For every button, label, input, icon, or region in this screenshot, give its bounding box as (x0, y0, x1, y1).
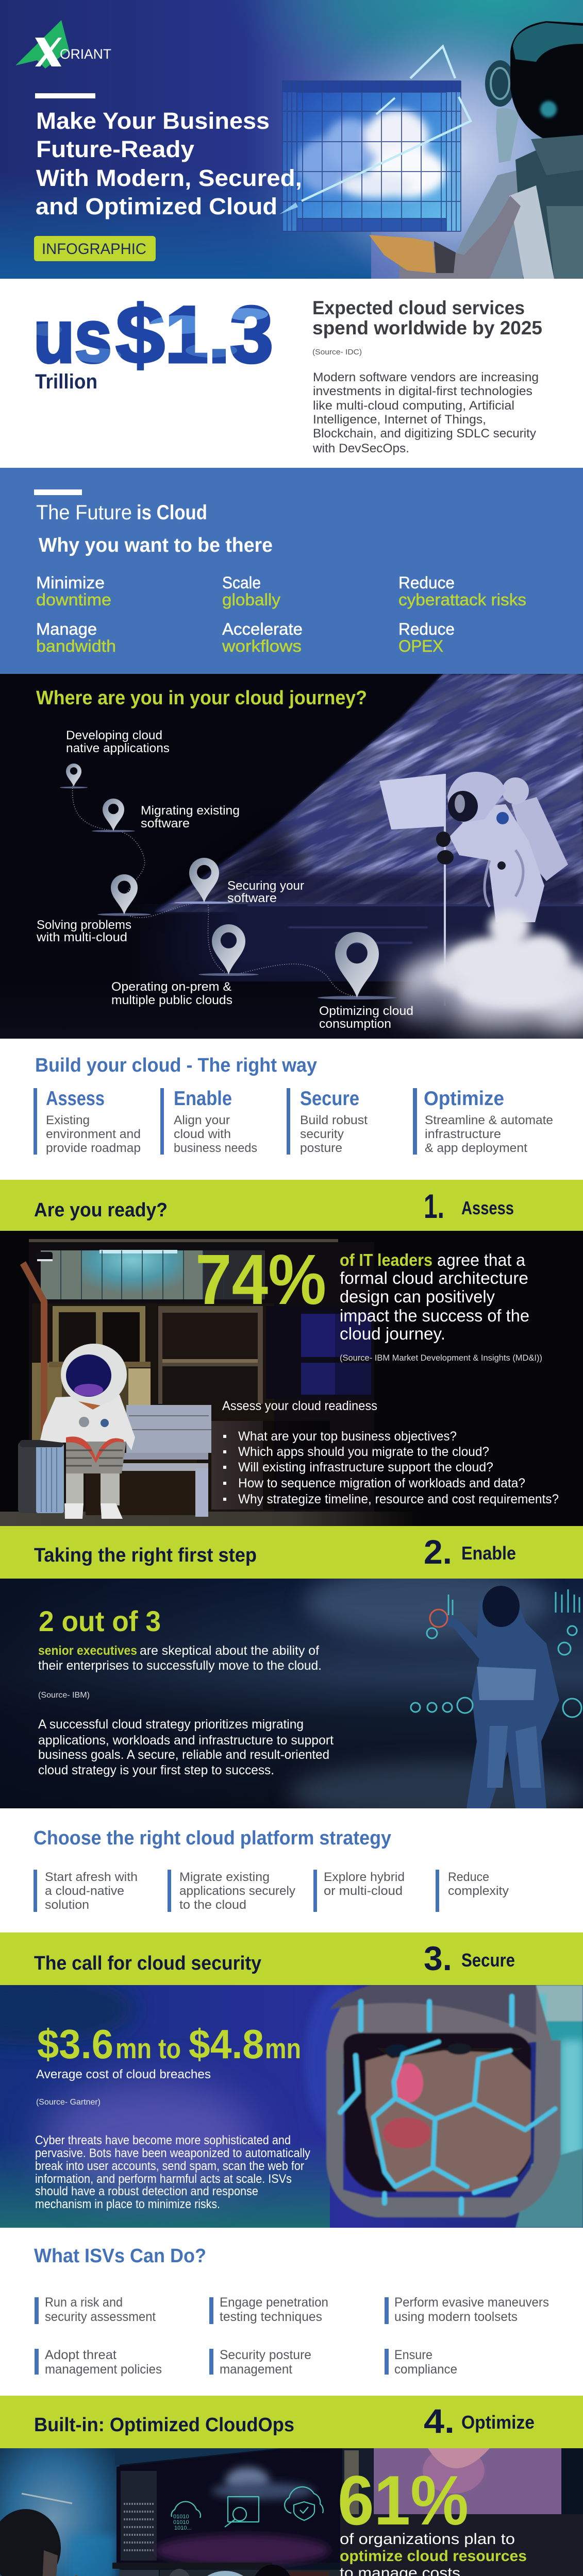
column: assess (34, 1088, 141, 1155)
text block: of IT leaders (340, 1250, 542, 1363)
icon: pin 5 operating (198, 924, 259, 976)
band: are you ready / assess: Are you ready? (34, 1199, 168, 1221)
labels: journey stages: Migrating existing (141, 804, 240, 818)
item: explore hybrid: or multi-cloud (324, 1884, 403, 1898)
panel: 61 percent optimize resources (0, 2448, 583, 2576)
screen icons (159, 2487, 323, 2576)
list: cloud benefits: Accelerate (222, 620, 303, 638)
labels: journey stages: consumption (319, 1017, 391, 1031)
clouds (392, 945, 583, 1046)
panel: build your cloud (34, 1055, 553, 1155)
item: evasive maneuvers (385, 2295, 549, 2324)
lit wall (41, 1250, 203, 1299)
band: the call for cloud security / secure: Secure (461, 1950, 515, 1971)
item: reduce complexity: Reduce (448, 1870, 489, 1884)
text block: senior executives: business goals. A secure, reliable and result-oriented (38, 1748, 329, 1762)
panel: spend statistic (34, 289, 542, 455)
column: optimize (413, 1088, 553, 1155)
icon: pin 1 developing (60, 764, 88, 788)
text block: modern software vendors: Modern software vendors are increasing (313, 370, 539, 384)
text block: cyber threats (35, 2067, 310, 2211)
text block: cyber threats: Cyber threats have become more sophisticated and (35, 2133, 291, 2147)
title (35, 93, 302, 219)
column: optimize: Streamline & automate (425, 1113, 553, 1127)
text block: modern software vendors: like multi-cloud computing, Artificial (313, 399, 514, 413)
item: run a risk assessment: Run a risk and (45, 2295, 123, 2310)
big number: US$1.3 trillion: $ (115, 289, 165, 381)
suit (449, 804, 544, 922)
panel: what ISVs can do (34, 2245, 549, 2377)
panel: average cost of cloud breaches (0, 1985, 583, 2228)
heading: expected cloud services: (Source- IDC) (312, 348, 362, 357)
item: threat management: Adopt threat (45, 2348, 116, 2362)
text block: of IT leaders: design can positively (340, 1287, 495, 1306)
column: assess: provide roadmap (46, 1141, 141, 1155)
item: explore hybrid (313, 1870, 405, 1912)
badge: infographic: INFOGRAPHIC (42, 241, 146, 258)
band: built-in optimized cloudops / optimize: Built-in: Optimized CloudOps (34, 2414, 294, 2436)
panel: choose the right cloud platform strategy (34, 1827, 509, 1912)
downpipe (20, 1261, 47, 1432)
text block: cyber threats: Average cost of cloud breaches (36, 2067, 211, 2081)
heading: the future is cloud: The Future (36, 501, 132, 524)
heading: what ISVs can do: What ISVs Can Do? (34, 2245, 206, 2267)
band: built-in optimized cloudops / optimize: Optimize (461, 2412, 535, 2433)
item: migrate existing (168, 1870, 295, 1912)
column: enable: Align your (174, 1113, 230, 1127)
illustration: astronaut with holographic rings (289, 1566, 583, 1824)
labels: journey stages: native applications (66, 741, 170, 755)
item: evasive maneuvers: Perform evasive maneuvers (394, 2295, 549, 2310)
text block: of IT leaders: formal cloud architecture (340, 1268, 528, 1287)
flag and pole (444, 774, 446, 1006)
column: enable (160, 1088, 257, 1155)
big number: 61%: 61% (338, 2461, 469, 2539)
item: penetration testing: Engage penetration (220, 2295, 328, 2310)
column: assess: Assess (46, 1088, 105, 1110)
list: cloud benefits: Reduce (398, 573, 455, 592)
hand and forearm (398, 196, 521, 279)
column: secure (287, 1088, 368, 1155)
icon: pin 3 solving (97, 874, 151, 916)
suitcase (18, 1442, 64, 1513)
list: assess your cloud readiness: Why strategize timeline, resource and cost requirements? (238, 1492, 559, 1506)
item: start afresh (34, 1870, 138, 1912)
text block: optimize resources: of organizations plan to (340, 2531, 515, 2548)
badge: infographic (34, 236, 156, 261)
labels: journey stages (36, 728, 413, 1031)
path: journey dotted route (73, 786, 356, 996)
column: optimize: Optimize (424, 1088, 504, 1110)
item: reduce complexity: complexity (448, 1884, 509, 1898)
item: start afresh: solution (45, 1898, 89, 1912)
text block: cyber threats: pervasive. Bots have been weaponized to automatically (35, 2146, 310, 2160)
labels: journey stages: Solving problems (37, 918, 131, 932)
screen icons: 01010 (173, 2514, 189, 2520)
big number: US$1.3 trillion: us (34, 295, 112, 378)
labels: journey stages: with multi-cloud (36, 930, 127, 944)
illustration: astronaut on a bench outside a hut (0, 1239, 583, 1526)
item: migrate existing: to the cloud (179, 1898, 246, 1912)
band: the call for cloud security / secure: 3. (424, 1939, 452, 1977)
item: start afresh: a cloud-native (45, 1884, 124, 1898)
labels: journey stages: Optimizing cloud (319, 1004, 413, 1018)
text block: modern software vendors: with DevSecOps. (312, 442, 409, 455)
labels: journey stages: Operating on-prem & (111, 980, 231, 994)
item: run a risk assessment (35, 2295, 156, 2324)
title: Make Your Business (36, 108, 270, 134)
text block: cyber threats: information, and perform harmful acts at scale. ISVs (35, 2172, 292, 2186)
column: secure: Build robust (300, 1113, 368, 1127)
list: assess your cloud readiness: Which apps should you migrate to the cloud? (238, 1445, 489, 1459)
text block: modern software vendors: Blockchain, and digitizing SDLC security (313, 427, 536, 440)
text block: senior executives: (Source- IBM) (38, 1691, 90, 1700)
band: built-in optimized cloudops / optimize (0, 2396, 583, 2448)
column: optimize: & app deployment (425, 1141, 527, 1155)
item: reduce complexity (436, 1870, 509, 1912)
item: security posture (209, 2348, 311, 2377)
heading: why you want to be there: Why you want to be there (39, 534, 273, 556)
list: cloud benefits: globally (222, 590, 280, 609)
column: optimize: infrastructure (425, 1127, 501, 1141)
labels: journey stages: software (227, 891, 277, 905)
windows and frames (32, 1303, 274, 1520)
heading: the future is cloud (36, 501, 207, 524)
panel: 74 percent of IT leaders (0, 1231, 583, 1526)
band: the call for cloud security / secure (0, 1933, 583, 1985)
list: cloud benefits: workflows (222, 637, 302, 655)
item: start afresh: Start afresh with (45, 1870, 138, 1884)
text block: modern software vendors (312, 370, 539, 455)
column: enable: business needs (174, 1141, 257, 1155)
text block: senior executives: are skeptical about the ability of (140, 1643, 319, 1658)
heading: expected cloud services: Expected cloud services (312, 297, 525, 318)
panel: cloud journey (0, 674, 583, 1039)
text block: of IT leaders: (Source- IBM Market Development & Insights (MD&I)) (340, 1353, 542, 1363)
labels: journey stages: Securing your (227, 879, 304, 893)
illustration: cloud operations control room (0, 2447, 583, 2576)
item: ensure compliance: compliance (394, 2362, 457, 2377)
heading: choose strategy: Choose the right cloud platform strategy (34, 1827, 391, 1849)
stat: $3.6mn to $4.8mn: mn (265, 2032, 301, 2064)
screen icons: 1010... (174, 2525, 192, 2531)
stat: $3.6mn to $4.8mn (37, 2021, 301, 2067)
text block: senior executives: cloud strategy is your first step to success. (38, 1763, 274, 1777)
text block: modern software vendors: investments in digital-first technologies (313, 384, 532, 398)
column: secure: Secure (300, 1088, 359, 1110)
illustration: wire cage with cloud (282, 81, 461, 231)
item: migrate existing: applications securely (179, 1884, 295, 1898)
text block: senior executives: A successful cloud strategy prioritizes migrating (38, 1717, 304, 1732)
list: assess your cloud readiness: What are your top business objectives? (238, 1429, 457, 1444)
list: cloud benefits: cyberattack risks (398, 590, 526, 609)
illustration: moon landscape and astronaut (0, 674, 583, 1039)
logo: Xoriant: ORIANT (60, 46, 111, 62)
text block: optimize resources: optimize cloud resources (340, 2548, 527, 2565)
logo: Xoriant (15, 20, 111, 69)
big number: 74%: 74% (195, 1240, 326, 1319)
list: cloud benefits: Scale (222, 573, 261, 592)
panel: 2 out of 3 senior executives (0, 1579, 583, 1808)
column: enable: cloud with (174, 1127, 231, 1141)
title: and Optimized Cloud (36, 193, 277, 219)
labels: journey stages: multiple public clouds (111, 993, 232, 1007)
list: cloud benefits: Minimize (36, 573, 105, 592)
panel: the future is cloud (0, 468, 583, 674)
stat: $3.6mn to $4.8mn: mn to (115, 2032, 181, 2064)
item: run a risk assessment: security assessment (45, 2310, 156, 2324)
text block: senior executives: senior executives (38, 1643, 137, 1658)
list: cloud benefits: Reduce (398, 620, 455, 638)
item: penetration testing: testing techniques (220, 2310, 322, 2324)
icon: pin 4 securing (174, 858, 234, 904)
item: threat management (35, 2348, 162, 2377)
item: penetration testing (209, 2295, 328, 2324)
band: are you ready / assess: Assess (461, 1197, 514, 1218)
item: security posture: management (220, 2362, 292, 2377)
band: built-in optimized cloudops / optimize: 4. (424, 2402, 455, 2440)
panel: hero banner (0, 0, 583, 279)
person at desk and monitors (253, 2565, 292, 2576)
icon: hero triangle line (279, 46, 471, 214)
text block: senior executives (38, 1643, 334, 1777)
item: evasive maneuvers: using modern toolsets (394, 2310, 518, 2324)
band: are you ready / assess (0, 1180, 583, 1231)
heading: build your cloud: Build your cloud - The right way (35, 1055, 317, 1076)
title: With Modern, Secured, (36, 165, 302, 191)
text block: of IT leaders: agree that a (437, 1250, 526, 1269)
big number: US$1.3 trillion: Trillion (35, 370, 97, 393)
list: cloud benefits: bandwidth (36, 637, 116, 655)
icon: pin 2 migrating (92, 799, 135, 832)
band: taking the right first step / enable (0, 1526, 583, 1579)
illustration: astronaut face with hexagon light (304, 1984, 583, 2228)
column: enable: Enable (174, 1088, 232, 1110)
item: threat management: management policies (45, 2362, 162, 2377)
list: cloud benefits: Manage (36, 620, 97, 638)
band: taking the right first step / enable: Enable (461, 1543, 516, 1564)
list: assess your cloud readiness (222, 1399, 559, 1506)
text block: modern software vendors: Intelligence, Internet of Things, (313, 413, 486, 427)
screen icons: 01010 (173, 2519, 189, 2526)
item: ensure compliance (385, 2348, 457, 2377)
heading: the future is cloud: is Cloud (137, 501, 207, 524)
labels: journey stages: software (141, 817, 190, 831)
band: are you ready / assess: 1. (424, 1187, 444, 1225)
big number: US$1.3 trillion (34, 289, 273, 393)
stat: $3.6mn to $4.8mn: $3.6 (37, 2021, 113, 2067)
stat: 2 out of 3: 2 out of 3 (39, 1605, 161, 1637)
visor rim (326, 2040, 561, 2217)
list: cloud benefits: OPEX (398, 637, 443, 655)
list: assess your cloud readiness: Will existing infrastructure support the cloud? (238, 1460, 493, 1475)
text block: senior executives: their enterprises to successfully move to the cloud. (38, 1658, 322, 1673)
visor (343, 2033, 531, 2192)
suit (40, 1395, 135, 1450)
list: assess your cloud readiness: Assess your cloud readiness (222, 1399, 377, 1413)
list: cloud benefits (36, 573, 526, 655)
list: assess your cloud readiness: How to sequence migration of workloads and data? (238, 1476, 525, 1490)
bench (126, 1405, 211, 1453)
item: security posture: Security posture (220, 2348, 311, 2362)
text block: senior executives: applications, workloads and infrastructure to support (38, 1733, 334, 1748)
text block: optimize resources (339, 2531, 527, 2576)
stat: $3.6mn to $4.8mn: $4.8 (189, 2021, 264, 2067)
list: cloud benefits: downtime (36, 590, 111, 609)
band: the call for cloud security / secure: The call for cloud security (34, 1953, 261, 1974)
item: explore hybrid: Explore hybrid (324, 1870, 405, 1884)
heading: expected cloud services: spend worldwide by 2025 (312, 317, 542, 338)
column: secure: posture (300, 1141, 342, 1155)
backpack (511, 797, 568, 881)
floor (0, 1512, 583, 1526)
big number: US$1.3 trillion: 1.3 (165, 290, 273, 380)
band: taking the right first step / enable: Taking the right first step (34, 1545, 257, 1566)
illustration: robot astronaut with open hand (369, 21, 583, 279)
column: assess: environment and (46, 1127, 141, 1141)
column: assess: Existing (46, 1113, 90, 1127)
item: ensure compliance: Ensure (394, 2348, 432, 2362)
title: Future-Ready (36, 136, 194, 162)
heading: where are you in your cloud journey: Where are you in your cloud journey? (36, 687, 367, 709)
text block: of IT leaders: of IT leaders (340, 1250, 432, 1269)
item: migrate existing: Migrate existing (179, 1870, 270, 1884)
text block: cyber threats: should have a robust detection and response (35, 2184, 258, 2198)
column: secure: security (300, 1127, 344, 1141)
text block: cyber threats: break into user accounts, send spam, scan the web for (35, 2159, 304, 2173)
labels: journey stages: Developing cloud (66, 728, 162, 742)
text block: of IT leaders: impact the success of the (340, 1306, 529, 1325)
band: taking the right first step / enable: 2. (424, 1533, 452, 1571)
text block: cyber threats: mechanism in place to minimize risks. (35, 2197, 220, 2211)
icon: pin 6 optimizing (318, 932, 396, 999)
text block: of IT leaders: cloud journey. (340, 1324, 445, 1343)
text block: cyber threats: (Source- Gartner) (36, 2098, 101, 2107)
heading: expected cloud services (312, 297, 542, 357)
